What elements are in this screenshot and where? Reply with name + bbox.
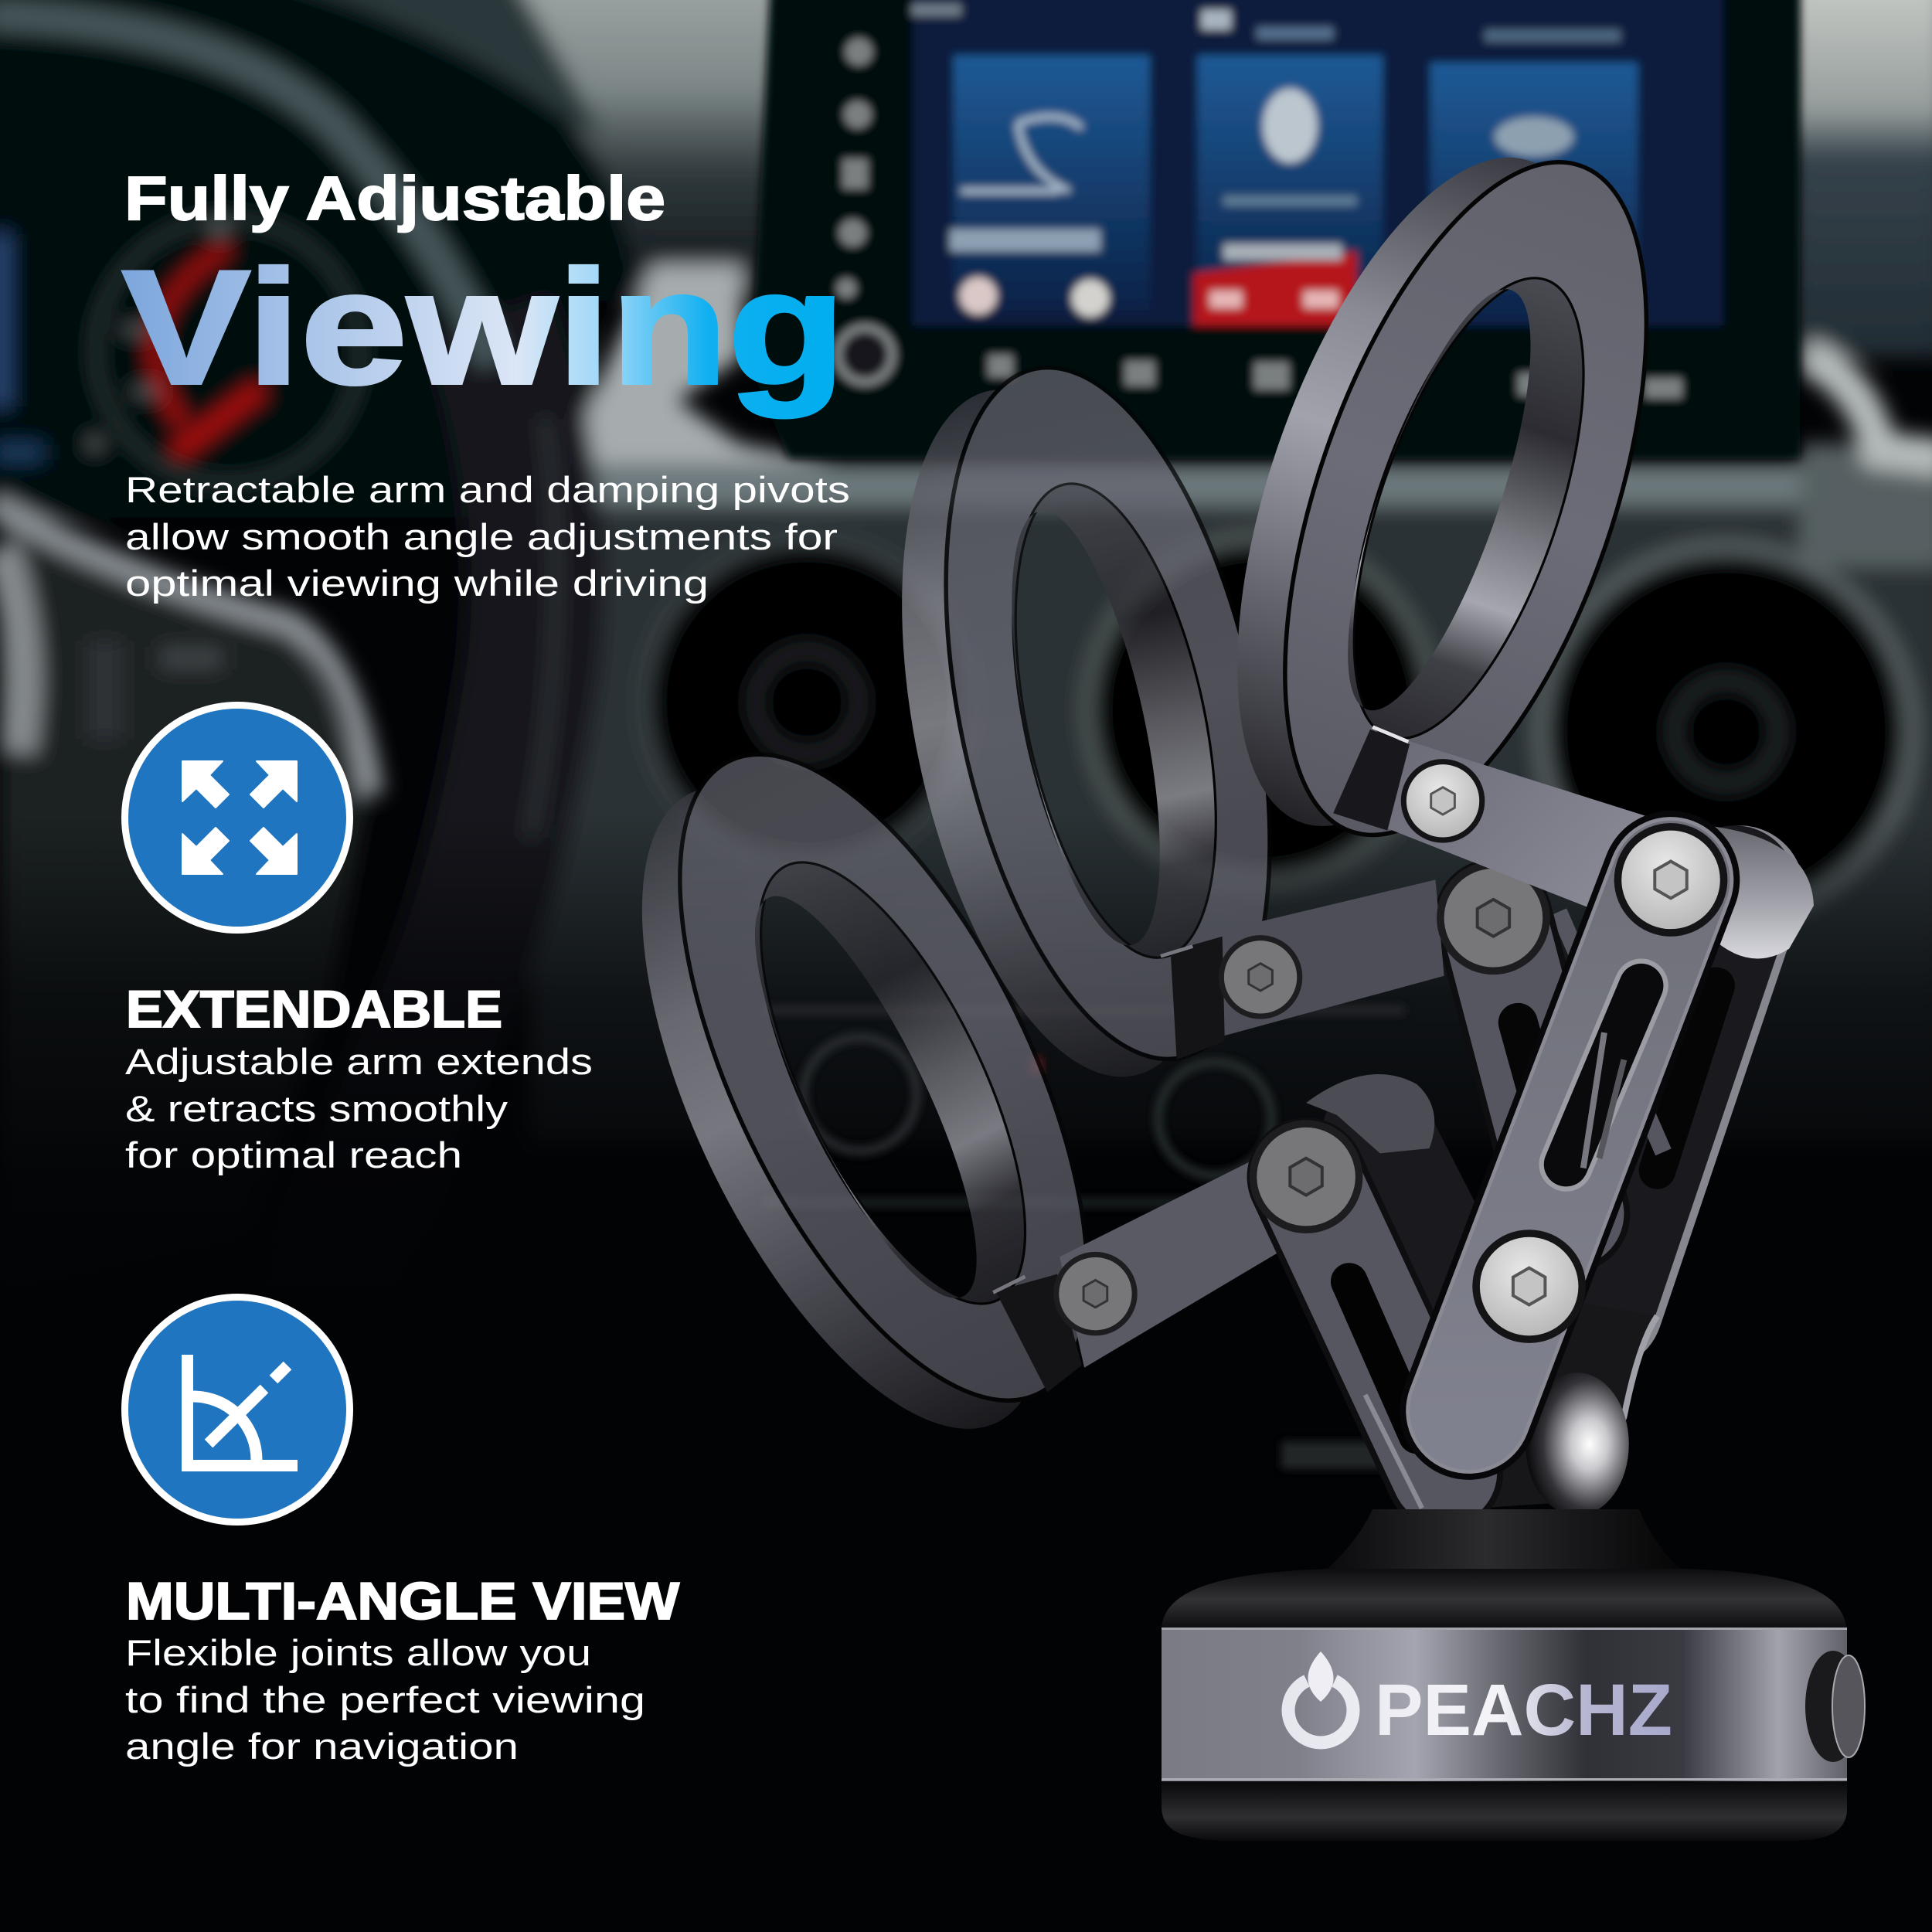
product: phone mount illustration bbox=[555, 103, 1865, 1841]
ring: lower position bbox=[555, 698, 1173, 1486]
rear link behind front arm bbox=[1441, 825, 1814, 1511]
lower link and arm bbox=[993, 1074, 1491, 1509]
intro paragraph bbox=[125, 469, 850, 604]
feature: extendable bbox=[125, 980, 593, 1175]
ring: upper position bbox=[1165, 103, 1719, 886]
feature: extendable: for optimal reach bbox=[125, 1134, 462, 1175]
icon: extendable arrows bbox=[125, 705, 349, 930]
lower console faint detail bbox=[764, 1005, 1417, 1469]
feature: extendable: Adjustable arm extends bbox=[125, 1041, 593, 1082]
base silver band bbox=[1162, 1628, 1847, 1781]
feature: multi-angle view bbox=[125, 1572, 680, 1767]
base button bbox=[1805, 1651, 1865, 1762]
intro paragraph: optimal viewing while driving bbox=[125, 563, 709, 604]
middle link and arm bbox=[1161, 861, 1663, 1213]
brand name: PEACHZ bbox=[1375, 1669, 1672, 1751]
fade to black bbox=[0, 813, 1932, 1331]
feature: multi-angle view: MULTI-ANGLE VIEW bbox=[126, 1572, 680, 1631]
feature: extendable: & retracts smoothly bbox=[125, 1088, 509, 1129]
feature: multi-angle view: Flexible joints allow you bbox=[125, 1632, 591, 1673]
base upper cap bbox=[1162, 1569, 1847, 1631]
feature: extendable: EXTENDABLE bbox=[126, 980, 502, 1039]
brand logo icon bbox=[1288, 1651, 1353, 1743]
base: mount stand bbox=[1162, 1509, 1865, 1841]
feature: multi-angle view: to find the perfect viewing bbox=[125, 1679, 645, 1720]
title line 2: Viewing bbox=[122, 236, 845, 418]
icon: multi-angle bbox=[125, 1297, 349, 1522]
title bbox=[122, 164, 845, 418]
upper arm bbox=[1333, 727, 1645, 912]
vents bbox=[645, 539, 970, 865]
gauge cluster bbox=[96, 219, 360, 483]
base lower cap bbox=[1162, 1781, 1847, 1841]
ring: middle position bbox=[845, 339, 1326, 1106]
steering wheel rim bbox=[296, 315, 534, 1380]
title line 1: Fully Adjustable bbox=[124, 164, 665, 233]
screen bbox=[752, 0, 1800, 458]
front link bbox=[1469, 823, 1727, 1411]
ball joint bbox=[1526, 1372, 1629, 1515]
feature: multi-angle view: angle for navigation bbox=[125, 1726, 519, 1767]
intro paragraph: Retractable arm and damping pivots bbox=[125, 469, 850, 510]
hub bbox=[0, 518, 369, 1294]
intro paragraph: allow smooth angle adjustments for bbox=[125, 516, 838, 557]
base cone bbox=[1328, 1509, 1679, 1569]
light dash blob bbox=[573, 265, 862, 508]
